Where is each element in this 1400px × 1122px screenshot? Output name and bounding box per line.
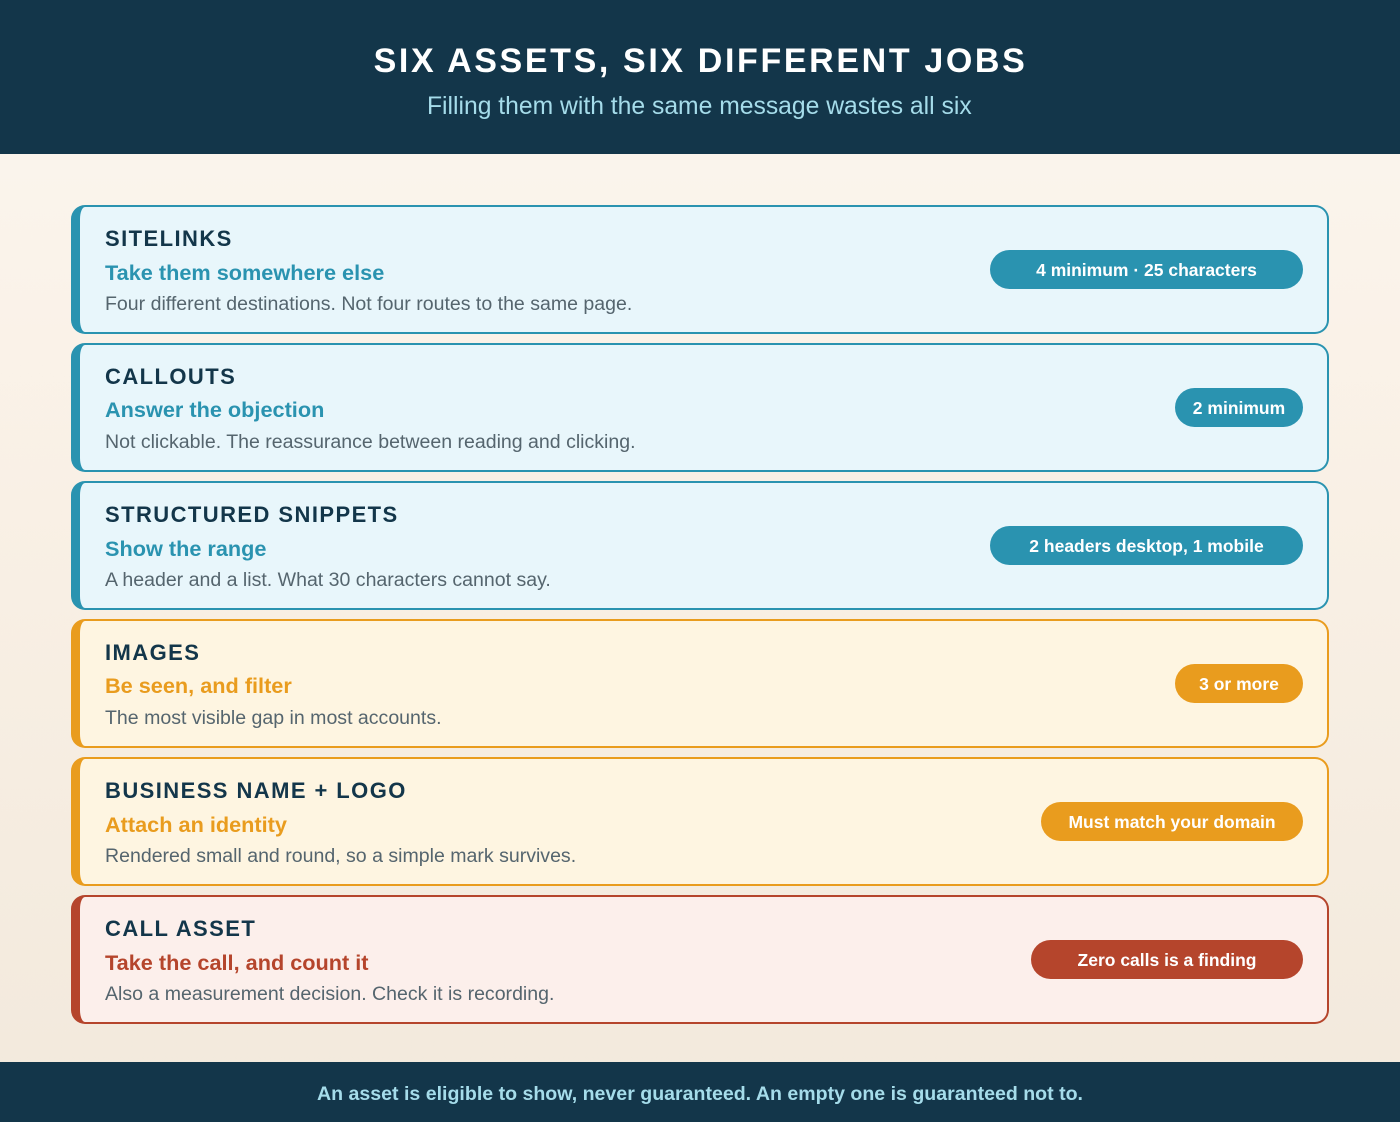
images badge — [1174, 664, 1302, 702]
callouts job: Answer the objection — [105, 396, 324, 422]
sitelinks description: Four different destinations. Not four routes to the same page. — [105, 292, 632, 314]
sitelinks badge: 4 minimum · 25 characters — [1036, 260, 1257, 280]
callouts description: Not clickable. The reassurance between reading and clicking. — [105, 430, 636, 452]
callouts badge: 2 minimum — [1193, 398, 1285, 418]
subtitle: Filling them with the same message wastes all six — [427, 93, 972, 120]
panel: call asset — [71, 895, 1329, 1024]
structured snippets name: STRUCTURED SNIPPETS — [105, 502, 399, 526]
callouts name: CALLOUTS — [105, 364, 236, 388]
structured snippets job: Show the range — [105, 536, 266, 560]
structured snippets description: A header and a list. What 30 characters cannot say. — [105, 568, 551, 590]
structured snippets badge — [990, 526, 1302, 564]
images job: Be seen, and filter — [105, 672, 292, 698]
footer band — [0, 1062, 1400, 1122]
business name and logo job: Attach an identity — [105, 812, 287, 836]
sitelinks badge — [990, 250, 1302, 288]
panel: images — [71, 619, 1329, 748]
business name and logo name: BUSINESS NAME + LOGO — [105, 778, 407, 802]
call asset badge: Zero calls is a finding — [1078, 950, 1256, 970]
images badge: 3 or more — [1199, 674, 1279, 694]
sitelinks job: Take them somewhere else — [105, 260, 384, 284]
panel: business name and logo — [71, 757, 1329, 886]
call asset description: Also a measurement decision. Check it is recording. — [105, 982, 554, 1004]
header band — [0, 0, 1400, 154]
structured snippets badge: 2 headers desktop, 1 mobile — [1029, 536, 1264, 556]
callouts badge — [1174, 388, 1302, 426]
business name and logo badge — [1040, 802, 1302, 840]
business name and logo badge: Must match your domain — [1068, 812, 1276, 832]
panel: sitelinks — [71, 205, 1329, 334]
sitelinks name: SITELINKS — [105, 226, 233, 250]
call asset job: Take the call, and count it — [105, 950, 369, 974]
footer note: An asset is eligible to show, never guaranteed. An empty one is guaranteed not to. — [317, 1083, 1083, 1105]
panel: callouts — [71, 343, 1329, 472]
call asset badge — [1030, 940, 1302, 978]
title: SIX ASSETS, SIX DIFFERENT JOBS — [374, 42, 1027, 80]
business name and logo description: Rendered small and round, so a simple mark survives. — [105, 844, 576, 866]
images name: IMAGES — [105, 640, 200, 664]
images description: The most visible gap in most accounts. — [105, 706, 442, 728]
call asset name: CALL ASSET — [105, 916, 256, 940]
panel: structured snippets — [71, 481, 1329, 610]
